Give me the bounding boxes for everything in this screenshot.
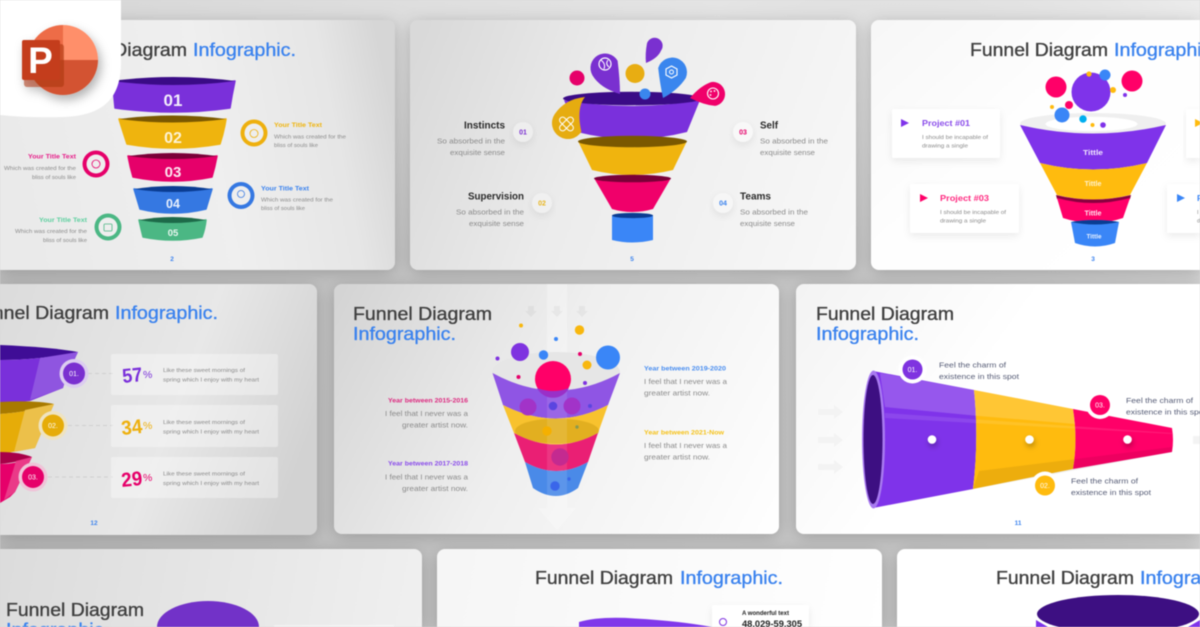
stat card 29%: spring which I enjoy with my heart xyxy=(163,481,260,487)
page number: 5 xyxy=(630,256,634,263)
title xyxy=(0,303,218,323)
callout: blue ribbon: bliss of souls like xyxy=(261,206,305,212)
callout: green calendar: Your Title Text xyxy=(39,217,88,224)
funnel band 04 xyxy=(134,186,212,213)
item: Teams xyxy=(713,192,808,228)
title xyxy=(353,304,492,344)
badge 03 with text: 03. xyxy=(1095,402,1105,410)
drop: small purple xyxy=(646,38,663,63)
card: Project #02 xyxy=(1186,109,1200,158)
panel: slide with translucent funnel and years xyxy=(334,284,779,534)
funnel band 05 xyxy=(139,217,206,240)
stat card 34%: spring which I enjoy with my heart xyxy=(163,430,260,436)
card: Project #03: I should be incapable of xyxy=(940,210,1007,216)
funnel: Tittle xyxy=(1084,181,1102,188)
callout: blue ribbon: Your Title Text xyxy=(261,186,310,192)
badge 02 xyxy=(38,411,113,440)
badge 01 with text xyxy=(898,356,1020,384)
flow arrows xyxy=(818,405,1200,474)
drop: gear xyxy=(658,58,687,98)
callout: green calendar xyxy=(15,214,122,244)
funnel band 02: 02 xyxy=(164,130,182,147)
funnel band 02 xyxy=(119,116,226,148)
text: 2015-2016: Year between 2015-2016 xyxy=(388,398,468,404)
title: Funnel Diagram xyxy=(996,568,1134,588)
item: Instincts: exquisite sense xyxy=(450,148,505,157)
stat card 34%: % xyxy=(143,420,152,432)
badge 02: 02. xyxy=(48,423,58,430)
item: Self: So absorbed in the xyxy=(760,136,828,146)
panel: slide 11, horizontal cone xyxy=(796,284,1200,534)
page number: 12 xyxy=(90,520,98,527)
title: Funnel Diagram xyxy=(6,600,144,620)
text: 2019-2020 xyxy=(644,366,728,398)
card: wonderful text: A wonderful text xyxy=(742,610,790,617)
translucent funnel xyxy=(492,352,620,497)
text: 2021-Now xyxy=(644,430,728,462)
panel: bottom-center slide xyxy=(437,549,882,627)
text: 2015-2016 xyxy=(385,398,469,430)
funnel band 01: 01 xyxy=(164,91,182,110)
panel: bottom-left slide xyxy=(0,549,422,627)
stat card 57%: % xyxy=(143,369,152,381)
card: Project #04 xyxy=(1167,184,1200,233)
title: Funnel Diagram xyxy=(48,40,187,60)
light vertical band and arrow xyxy=(525,284,588,530)
callout: pink globe xyxy=(4,150,110,181)
callout: yellow alarm: Your Title Text xyxy=(274,122,323,129)
text: 2021-Now: greater artist now. xyxy=(644,452,710,462)
item: Teams: Teams xyxy=(740,192,771,202)
text: 2019-2020: Year between 2019-2020 xyxy=(644,366,726,372)
card: wonderful text xyxy=(712,605,809,627)
item: Self xyxy=(733,120,828,157)
stat card 57% xyxy=(111,354,278,395)
callout: blue ribbon xyxy=(228,182,333,212)
item: Teams: exquisite sense xyxy=(740,219,795,228)
title: Infographic. xyxy=(353,324,456,344)
funnel segment pink xyxy=(0,452,32,503)
title xyxy=(996,568,1200,588)
item: Instincts: 01 xyxy=(519,130,527,136)
funnel band 03 xyxy=(128,153,217,181)
card: Project #03: Project #03 xyxy=(940,193,989,203)
panel: slide 2, five-step funnel xyxy=(0,20,395,270)
badge 02 with text xyxy=(1031,472,1152,500)
item: Supervision: Supervision xyxy=(468,192,524,202)
title: Funnel Diagram xyxy=(816,304,954,324)
text: 2017-2018: Year between 2017-2018 xyxy=(388,460,468,468)
item: Instincts: So absorbed in the xyxy=(437,136,505,146)
cone markers xyxy=(928,435,1132,444)
text: 2017-2018 xyxy=(385,460,469,493)
title: Funnel Diagram xyxy=(535,568,673,588)
title xyxy=(535,568,783,588)
funnel xyxy=(563,92,701,242)
panel: slide 3, funnel with project cards xyxy=(871,20,1200,270)
icon: PowerPoint logo: P xyxy=(28,40,53,81)
card: Project #01: drawing a single xyxy=(922,144,968,150)
badge 02 with text: existence in this spot xyxy=(1071,488,1152,497)
stat card 34% xyxy=(111,405,278,447)
item: Supervision: So absorbed in the xyxy=(456,208,524,216)
badge 03 with text xyxy=(1086,391,1200,419)
stat card 29% xyxy=(111,457,278,498)
page number: 11 xyxy=(1015,520,1022,527)
text: 2017-2018: I feel that I never was a xyxy=(385,472,469,482)
bubbles xyxy=(1046,70,1142,128)
item: Supervision xyxy=(456,192,552,228)
funnel segment yellow xyxy=(0,401,54,455)
funnel band 03: 03 xyxy=(165,164,181,181)
drop: globe xyxy=(590,53,620,94)
badge 02 with text: 02. xyxy=(1040,483,1050,490)
stat card 57%: 57 xyxy=(121,364,143,388)
title: Funnel Diagram xyxy=(970,40,1108,60)
panel: slide 5, funnel with drops xyxy=(410,20,856,270)
panel: slide 12, percentages xyxy=(0,284,317,535)
item: Self: Self xyxy=(760,120,779,132)
card: Project #01 xyxy=(892,109,1000,158)
drop: palette xyxy=(690,82,725,106)
funnel: Tittle xyxy=(1086,234,1102,240)
funnel: Tittle xyxy=(1083,148,1103,157)
page number: 3 xyxy=(1091,256,1095,263)
funnel top xyxy=(157,601,259,627)
title: Infographic. xyxy=(115,303,218,323)
callout: green calendar: Which was created for the xyxy=(15,229,87,235)
title xyxy=(6,600,144,627)
card: Project #03: drawing a single xyxy=(940,218,986,224)
bubbles xyxy=(496,324,620,491)
callout: blue ribbon: Which was created for the xyxy=(261,198,333,204)
item: Self: exquisite sense xyxy=(760,148,815,157)
text: 2021-Now: I feel that I never was a xyxy=(644,441,728,450)
floating circles xyxy=(570,64,650,100)
item: Supervision: 02 xyxy=(538,200,546,208)
funnel band 05: 05 xyxy=(168,228,179,239)
title: Infographic. xyxy=(193,40,296,60)
item: Instincts: Instincts xyxy=(464,120,505,132)
card: Project #01: Project #01 xyxy=(922,118,970,128)
card: Project #01: I should be incapable of xyxy=(922,135,989,141)
title xyxy=(970,40,1200,60)
item: Teams: So absorbed in the xyxy=(740,208,808,216)
text: 2019-2020: greater artist now. xyxy=(644,388,710,398)
badge 03 with text: Feel the charm of xyxy=(1126,396,1194,405)
callout: yellow alarm: Which was created for the xyxy=(274,134,346,140)
callout: pink globe: Your Title Text xyxy=(28,154,77,160)
badge 02 with text: Feel the charm of xyxy=(1071,476,1139,486)
badge 03: 03. xyxy=(28,474,38,482)
text: 2021-Now: Year between 2021-Now xyxy=(644,430,725,436)
text: 2015-2016: I feel that I never was a xyxy=(385,409,469,418)
stat card 57%: spring which I enjoy with my heart xyxy=(163,378,260,384)
callout: yellow alarm xyxy=(240,120,346,149)
title xyxy=(48,40,296,60)
panel: bottom-right slide xyxy=(897,549,1200,627)
purple callout partly hidden xyxy=(70,86,98,114)
badge 01 xyxy=(60,359,113,388)
horizontal cone xyxy=(862,370,1173,508)
item: Instincts xyxy=(437,120,533,157)
callout: pink globe: bliss of souls like xyxy=(32,175,76,181)
badge 01 with text: Feel the charm of xyxy=(939,360,1007,370)
title: Funnel Diagram xyxy=(353,304,492,324)
funnel band 04: 04 xyxy=(166,197,180,211)
stat card 34%: 34 xyxy=(120,416,144,440)
page number: 2 xyxy=(170,256,174,263)
funnel top xyxy=(579,618,712,627)
text: 2015-2016: greater artist now. xyxy=(402,420,468,430)
item: Supervision: exquisite sense xyxy=(469,219,524,228)
card xyxy=(274,625,394,627)
title: Infographic. xyxy=(816,324,919,344)
badge 01 with text: 01. xyxy=(908,367,917,374)
stat card 29%: 29 xyxy=(120,468,143,492)
title: Infographic. xyxy=(680,568,783,588)
drop: bandage xyxy=(552,97,585,139)
funnel: Tittle xyxy=(1084,210,1102,218)
callout: pink globe: Which was created for the xyxy=(4,166,76,172)
badge 01: 01. xyxy=(69,371,79,378)
item: Teams: 04 xyxy=(719,200,727,208)
funnel top xyxy=(1035,595,1200,627)
funnel band 01 xyxy=(112,77,235,112)
funnel segment purple xyxy=(0,345,78,404)
callout: green calendar: bliss of souls like xyxy=(43,238,87,244)
badge 01 with text: existence in this spot xyxy=(939,372,1020,381)
text: 2017-2018: greater artist now. xyxy=(402,484,468,493)
stat card 57%: Like these sweet mornings of xyxy=(163,368,246,374)
funnel xyxy=(1020,113,1166,246)
stat card 34%: Like these sweet mornings of xyxy=(163,420,246,426)
stat card 29%: Like these sweet mornings of xyxy=(163,472,246,478)
text: 2019-2020: I feel that I never was a xyxy=(644,377,728,386)
PowerPoint badge card xyxy=(0,0,121,117)
badge 03 xyxy=(18,462,113,492)
stat card 29%: % xyxy=(143,472,152,484)
title xyxy=(816,304,954,344)
badge 03 with text: existence in this spot xyxy=(1126,408,1200,416)
callout: yellow alarm: bliss of souls like xyxy=(274,143,318,149)
card: Project #03 xyxy=(910,184,1019,233)
item: Self: 03 xyxy=(739,130,747,136)
